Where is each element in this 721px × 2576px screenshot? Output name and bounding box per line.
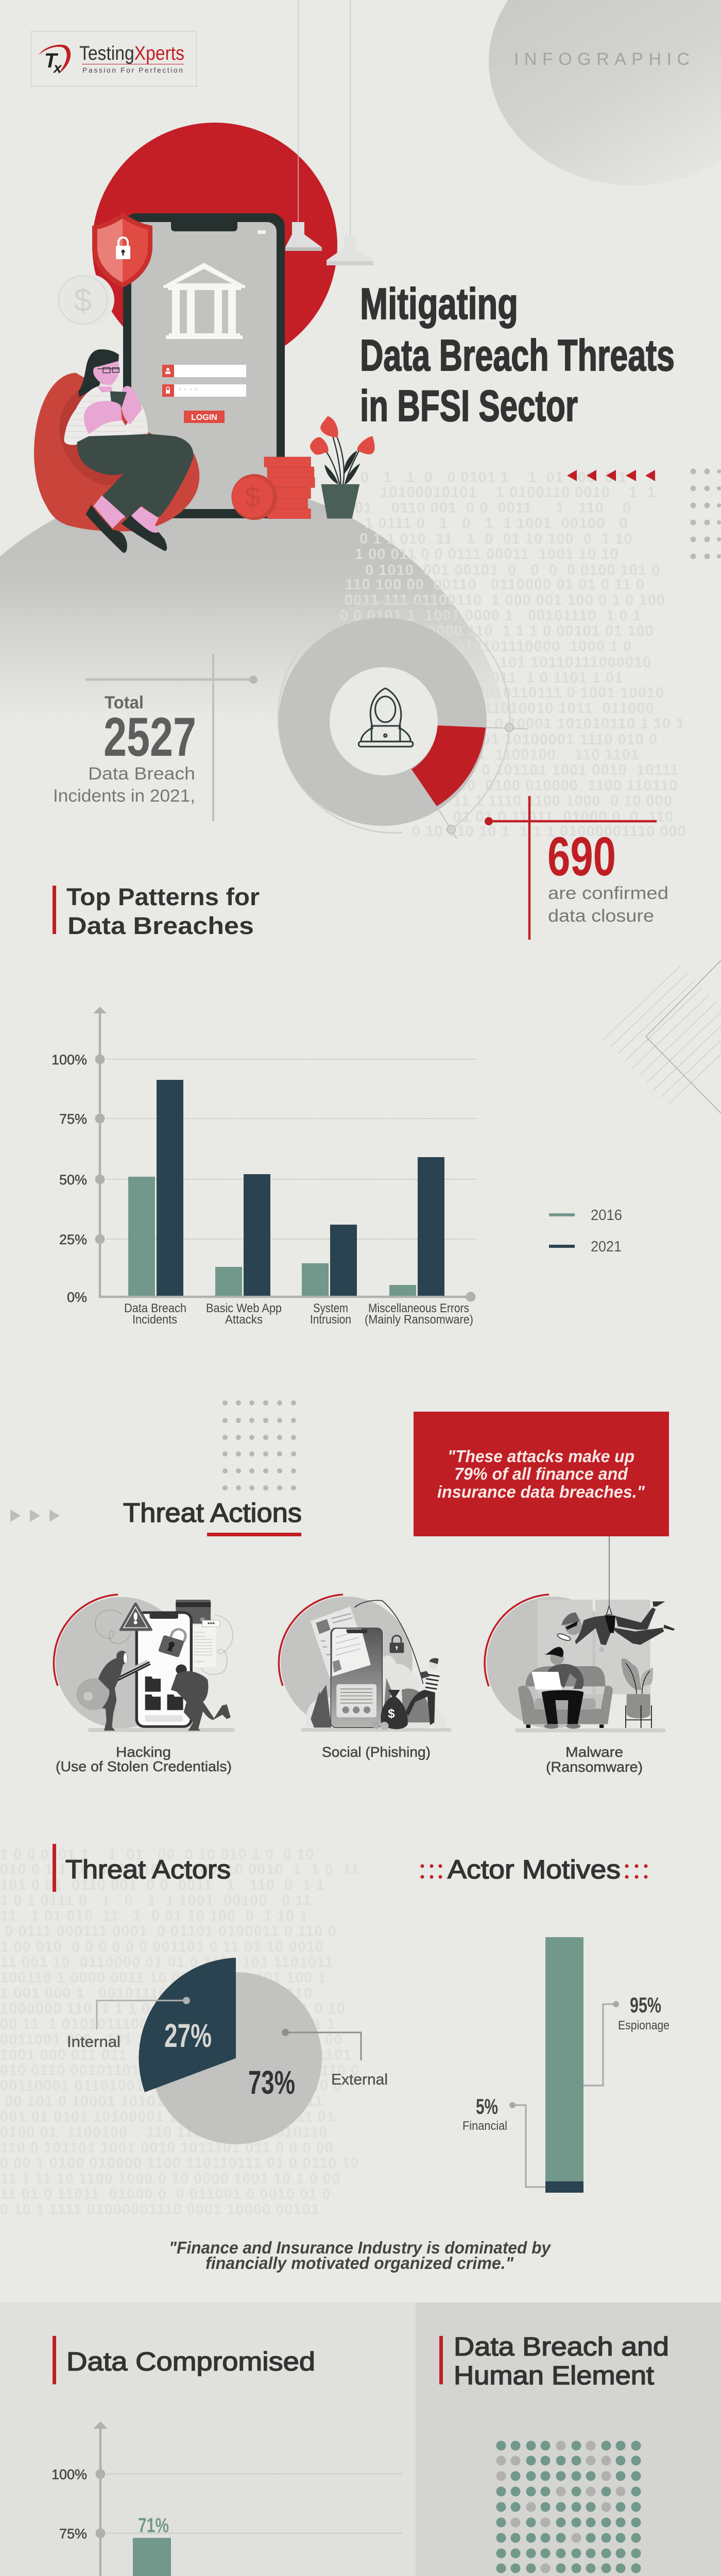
- hero red circle: [92, 123, 337, 368]
- chart legend: [549, 1207, 622, 1255]
- heading: top patterns: Top Patterns for: [66, 883, 260, 910]
- x labels: [124, 1301, 473, 1327]
- stat: total incidents: Total: [105, 693, 144, 713]
- x labels: (Mainly Ransomware): [365, 1313, 473, 1327]
- chart: top patterns bars: [52, 1007, 476, 1327]
- bar chart: data compromised: 75%: [59, 2526, 87, 2541]
- binary pattern behind threat actors: 0 00 1 0100 010000 1100 110110111 01 0 0110 10: [0, 2155, 359, 2172]
- pie chart: threat actors: [67, 1958, 388, 2144]
- binary pattern behind threat actors: 11 01 0 11011 01000 0 0 011001 0 0010 01 0: [0, 2186, 331, 2202]
- red arrows row: [567, 470, 655, 481]
- bars 2016: [128, 1177, 416, 1296]
- company logo badge: Passion For Perfection: [82, 66, 183, 74]
- callout: financial: Financial: [462, 2119, 507, 2133]
- coin stack: [231, 457, 315, 520]
- heading: threat actions: Threat Actions: [123, 1498, 302, 1528]
- binary pattern behind threat actors: 1 001 000 1 00101110 0 1 0 0 01110 0 110: [0, 1985, 312, 2002]
- label: hacking: (Use of Stolen Credentials): [56, 1758, 232, 1774]
- binary pattern behind hero and donut: 11 1 1110 1100 1000 0 10 000: [453, 793, 673, 809]
- bar chart: data compromised: 100%: [52, 2467, 87, 2482]
- panel: phishing illustration: [279, 1595, 452, 1732]
- x labels: Attacks: [225, 1313, 263, 1327]
- binary pattern behind threat actors: 11 001 10 0110000 01 01 0 1101 101 1101011: [0, 1954, 334, 1971]
- ground hill: [0, 481, 518, 1110]
- binary pattern behind hero and donut: 0110 0010110111 0 1001 10010: [433, 685, 664, 701]
- binary pattern behind hero and donut: 1001000000 110 1 1 1 0 00101 01 100: [360, 623, 654, 639]
- binary pattern behind hero and donut: 01 0110 001 0 0 0011 1 110 0: [350, 500, 631, 516]
- stacked bar: actor motives: [462, 1937, 670, 2193]
- woman in bean bag: [34, 349, 199, 553]
- stat: confirmed closures: are confirmed: [548, 884, 668, 903]
- heading: top patterns: Data Breaches: [67, 912, 254, 939]
- x labels: Miscellaneous Errors: [368, 1301, 469, 1315]
- stat: total incidents: Incidents in 2021,: [53, 786, 195, 806]
- binary pattern behind hero and donut: 110 100 00 00110 0110000 01 01 0 11 0: [345, 577, 645, 593]
- panel: malware illustration: [485, 1536, 675, 1732]
- binary pattern behind threat actors: 1001 000 011 011 1 0 1101 1 01 100 01100 1101: [0, 2047, 352, 2063]
- callout: 79 percent: "These attacks make up: [448, 1447, 634, 1466]
- pie chart: threat actors: 27%: [164, 2017, 212, 2054]
- heading: actor motives: Actor Motives: [448, 1855, 621, 1884]
- logo mark: x: [53, 60, 62, 76]
- icon: dollar coin: $: [74, 283, 92, 318]
- donut chart: 690 of 2527: [278, 601, 528, 839]
- binary pattern behind threat actors: 1 0 1 0111 0 1 0 1 1 1001 00100 0 11: [0, 1892, 312, 1909]
- background blob top right: [489, 0, 721, 185]
- binary pattern behind threat actors: 0 0111 000111 0001 0 01101 0100011 0 110 0: [0, 1923, 337, 1940]
- x labels: Basic Web App: [206, 1301, 282, 1315]
- binary pattern behind hero and donut: 0 0 101101 1001 0010 10111: [464, 762, 679, 778]
- stat: total incidents: 2527: [104, 706, 196, 768]
- icon: bank building: [163, 263, 245, 339]
- heading: top patterns: [53, 883, 260, 939]
- callout: external: [282, 2029, 388, 2088]
- bar chart: data compromised: 71%: [138, 2514, 169, 2537]
- label: infographic: INFOGRAPHIC: [514, 49, 690, 69]
- quote: organized crime: financially motivated organized crime.": [205, 2253, 513, 2273]
- label: malware: (Ransomware): [546, 1759, 643, 1775]
- label: malware: [546, 1744, 643, 1775]
- binary pattern behind threat actors: 100110 1 0000 0011 10 001 110 10 101 100 1: [0, 1970, 327, 1986]
- binary pattern behind hero and donut: [340, 469, 686, 840]
- binary pattern behind hero and donut: 1 0111 0 1 0 1 1 1001 00100 0: [355, 515, 628, 532]
- binary pattern behind threat actors: 0 10 1 1111 01000001110 0001 10000 00101: [0, 2201, 320, 2218]
- hero title: Mitigating: [360, 280, 518, 329]
- panel: human element: Human Element: [454, 2361, 654, 2390]
- binary pattern behind hero and donut: 0 0 0101 1 1001 0000 1 00101110 1 0 1: [340, 607, 642, 624]
- company logo badge: [31, 31, 197, 87]
- y labels: 75%: [59, 1111, 87, 1127]
- panel: human element: Data Breach and: [454, 2332, 669, 2361]
- hero title: [360, 280, 675, 431]
- hanging lamps: [285, 0, 373, 265]
- callout: 79 percent: 79% of all finance and: [454, 1464, 628, 1483]
- callout: financial: 5%: [476, 2094, 498, 2119]
- binary pattern behind threat actors: 0100 01 1100100 110 1101 111 1 11010110: [0, 2124, 328, 2141]
- callout: financial: [462, 2094, 545, 2187]
- quote: organized crime: [169, 2238, 552, 2273]
- binary pattern behind threat actors: 110 0 101101 1001 0010 1011101 011 0 0 0 00: [0, 2140, 334, 2156]
- binary pattern behind threat actors: 010 0110 0010110111 0 1001 10010 010100 110 0: [0, 2062, 359, 2079]
- callout: internal: [67, 1997, 190, 2050]
- panel: hacking illustration: [54, 1595, 235, 1732]
- diagonal hatch decoration: [603, 960, 721, 1113]
- illustration: coins, plant and woman in bean bag: [34, 349, 375, 553]
- panel: data compromised: Data Compromised: [66, 2347, 315, 2376]
- binary pattern behind hero and donut: 10100010101 1 0100110 0010 1 1: [371, 484, 656, 501]
- logo mark: [39, 45, 71, 76]
- heading: threat actors: [53, 1844, 231, 1892]
- binary pattern behind threat actors: 101 0 01 0110 001 0 0 0011 1 110 0 1 1: [0, 1877, 325, 1893]
- x labels: Intrusion: [310, 1313, 351, 1327]
- binary pattern behind threat actors: 00 11 1 010101110000 1000 1 0 1 0 11 1 01 1: [0, 2016, 335, 2032]
- binary pattern behind hero and donut: 0011 111 01100110 1 000 001 100 0 1 0 100: [340, 592, 665, 608]
- illustration: phone with bank login: [123, 213, 285, 518]
- logo mark: T: [44, 49, 59, 72]
- panel: data compromised: [0, 2302, 416, 2576]
- icon: dollar coin: [59, 274, 114, 326]
- binary pattern behind threat actors: 1 0 0 0101 1 1 01 00 0 10 010 1 0 0 10: [0, 1846, 314, 1863]
- stat: confirmed closures: [485, 796, 668, 940]
- axes: [93, 1007, 476, 1301]
- binary pattern behind threat actors: 001 01 0101 10100001 1110 010 0 0 00 011 01: [0, 2109, 335, 2125]
- label: malware: Malware: [565, 1744, 623, 1760]
- callout: espionage: Espionage: [618, 2019, 670, 2032]
- pie chart: threat actors: 73%: [248, 2064, 295, 2101]
- y labels: 25%: [59, 1232, 87, 1247]
- binary pattern behind hero and donut: 0 1010 001 00101 0 0 0 0 0100 101 0: [360, 562, 660, 579]
- dot matrix: 82 percent: [496, 2441, 641, 2576]
- stat: confirmed closures: data closure: [548, 906, 654, 926]
- heading: threat actors: Threat Actors: [65, 1855, 231, 1884]
- binary pattern behind threat actors: 1 00 010 0 0 0 0 0 0 001101 0 11 01 10 0010: [0, 1939, 324, 1955]
- icon: shield with lock: [92, 212, 152, 287]
- y labels: 50%: [59, 1172, 87, 1188]
- binary pattern behind threat actors: 010 0 1 1 10100010101 0100110 0010 1 1 0 11: [0, 1861, 359, 1878]
- binary pattern behind threat actors: 1000000 110 1 1 1 0 00101 01 100001 011 0 10: [0, 2001, 346, 2017]
- x labels: System: [313, 1301, 348, 1315]
- binary pattern behind threat actors: 11 1 01 010 11 1 0 01 10 100 0 1 10 1: [0, 1908, 308, 1924]
- binary pattern behind hero and donut: 0 10 010 10 1 1 1 1 01000001110 000: [412, 823, 686, 840]
- callout: external: External: [331, 2071, 388, 2088]
- callout: 79 percent: [414, 1412, 669, 1536]
- binary pattern behind hero and donut: 00 0100 010000 1100 110110: [458, 777, 678, 794]
- callout: espionage: [583, 1993, 670, 2086]
- label: hacking: Hacking: [116, 1744, 171, 1760]
- login form: [162, 365, 246, 423]
- label: hacking: [56, 1744, 232, 1774]
- stat: confirmed closures: 690: [547, 825, 616, 887]
- binary pattern behind hero and donut: 01 01 0 11011 01000 0 0 110: [453, 809, 674, 825]
- potted plant: [310, 416, 375, 518]
- login form: ****: [179, 387, 201, 394]
- binary pattern behind hero and donut: 10001 011010010 1011 011000: [417, 700, 655, 717]
- y labels: 100%: [52, 1052, 87, 1067]
- login form: LOGIN: [191, 413, 217, 422]
- binary pattern behind threat actors: 0011001 000 101 10110111000010 0100 00 00: [0, 2031, 343, 2048]
- stat: total incidents: [53, 654, 258, 821]
- binary pattern behind hero and donut: 101 0 10001 101010110 1 10 1: [464, 716, 685, 732]
- binary pattern behind threat actors: 00 101 0 10001 101010110 1 10 1 00 0 0011: [0, 2093, 323, 2110]
- icon: hooded hacker: [358, 688, 413, 747]
- binary pattern behind threat actors: [0, 1846, 359, 2218]
- binary pattern behind threat actors: 11 1 11 10 1100 1000 0 10 0000 1001 10 1 0 00: [0, 2171, 340, 2187]
- y labels: 0%: [67, 1290, 87, 1305]
- logo wordmark: TestingXperts: [79, 43, 184, 64]
- panel: human element: [416, 2302, 721, 2576]
- stat: total incidents: Data Breach: [88, 764, 195, 784]
- x labels: Data Breach: [124, 1301, 186, 1315]
- y labels: [52, 1052, 87, 1305]
- binary pattern behind hero and donut: 0 1 1 0 0 0101 1 1 01 00 0 1: [360, 469, 627, 486]
- binary pattern behind hero and donut: 1 00 011 0 0 0111 00011 1001 10 10: [350, 546, 619, 563]
- bar chart: data compromised: [52, 2421, 404, 2576]
- x labels: Incidents: [132, 1313, 177, 1327]
- panel: hacking illustration: ***: [208, 1621, 215, 1628]
- bars 2021: [157, 1080, 444, 1296]
- grey arrows row: [10, 1510, 60, 1522]
- binary pattern behind hero and donut: 11001 000 101 10110111000010: [402, 654, 651, 671]
- grid lines: [107, 1059, 476, 1239]
- chart legend: 2016: [591, 1207, 622, 1224]
- binary pattern behind hero and donut: 01 1100100 110 1101: [464, 747, 640, 763]
- callout: 79 percent: insurance data breaches.": [437, 1482, 645, 1501]
- dot grid above threat actions: [222, 1400, 296, 1490]
- coin stack: $: [245, 482, 260, 513]
- panel: phishing illustration: $: [388, 1707, 395, 1721]
- chart legend: 2021: [591, 1239, 622, 1255]
- dot grid right edge: [690, 469, 721, 560]
- hero title: in BFSI Sector: [360, 382, 578, 431]
- binary pattern behind hero and donut: 01 0101 10100001 1110 010 0: [433, 732, 658, 748]
- binary pattern behind threat actors: 00110001 011010010 1011 011000 01 1 0 110 0: [0, 2078, 342, 2094]
- label: social phishing: Social (Phishing): [322, 1744, 431, 1760]
- callout: internal: Internal: [67, 2033, 121, 2050]
- quote: organized crime: "Finance and Insurance Industry is dominated by: [169, 2238, 552, 2257]
- binary pattern behind hero and donut: 00 1 010101110000 1000 1 0: [402, 638, 632, 655]
- binary pattern behind hero and donut: 0 1 1 010 11 1 0 01 10 100 0 1 10: [350, 531, 632, 547]
- callout: espionage: 95%: [630, 1993, 661, 2017]
- binary pattern behind hero and donut: 1 000 011 011 1 0 1101 1 01: [407, 670, 623, 686]
